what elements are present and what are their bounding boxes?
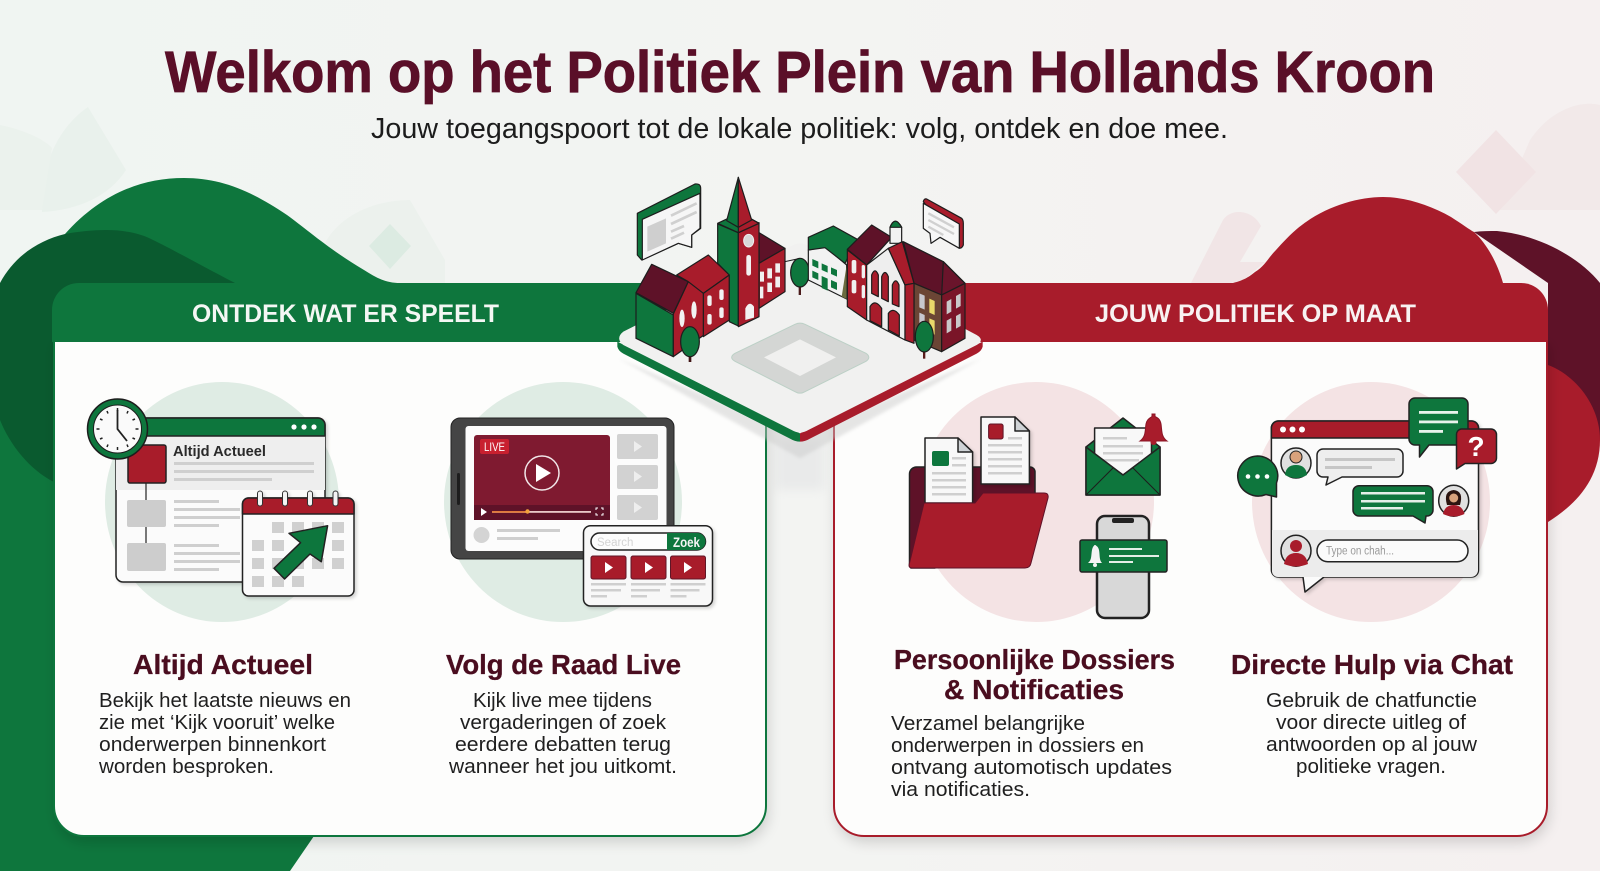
wire xyxy=(785,258,800,262)
plaza xyxy=(732,323,869,393)
body: eerdere debatten terug xyxy=(455,734,671,756)
body: voor directe uitleg of xyxy=(1276,712,1466,734)
platform shadow xyxy=(618,358,982,458)
document green xyxy=(925,438,973,503)
avatar 1 xyxy=(1281,448,1311,478)
town hall xyxy=(867,221,965,352)
chat input xyxy=(1317,540,1468,562)
text block: altijd actueel xyxy=(98,649,351,778)
body: antwoorden op al jouw xyxy=(1266,734,1478,756)
search card xyxy=(584,526,712,606)
body: via notificaties. xyxy=(891,779,1030,801)
body xyxy=(1266,690,1478,778)
avatar 2 xyxy=(1439,485,1469,516)
body: worden besproken. xyxy=(98,756,274,778)
search card: Zoek xyxy=(673,534,700,550)
tablet: LIVE xyxy=(484,442,505,454)
body: zie met ‘Kijk vooruit’ welke xyxy=(99,712,335,734)
browser window: Altijd Actueel xyxy=(173,443,266,460)
panel: ontdek wat er speelt xyxy=(52,283,766,836)
panel header right xyxy=(880,283,1548,342)
backdrop circle 4 xyxy=(1252,382,1490,622)
chat window xyxy=(1271,421,1478,592)
avatar 3 xyxy=(1281,535,1311,566)
bubble green left xyxy=(1238,456,1278,497)
heading: & Notificaties xyxy=(944,674,1124,705)
phone xyxy=(1080,516,1167,618)
document red xyxy=(981,417,1029,484)
backdrop circle 1 xyxy=(105,382,339,622)
body: Kijk live mee tijdens xyxy=(473,690,652,712)
title: Welkom op het Politiek Plein van Hollands Kroon xyxy=(165,40,1435,105)
heading: Altijd Actueel xyxy=(133,649,313,680)
icon: altijd actueel xyxy=(88,382,354,622)
bubble question: ? xyxy=(1467,431,1485,462)
subtitle: Jouw toegangspoort tot de lokale politiek: volg, ontdek en doe mee. xyxy=(371,113,1228,145)
shadow strip between panels xyxy=(776,440,824,490)
text block: persoonlijke dossiers xyxy=(891,644,1175,801)
platform top xyxy=(619,243,981,432)
red background blobs xyxy=(1233,197,1600,522)
search card: Search xyxy=(597,537,633,549)
body: vergaderingen of zoek xyxy=(460,712,667,734)
bubble green top xyxy=(1409,398,1468,457)
folder xyxy=(909,417,1048,568)
panel: jouw politiek op maat xyxy=(834,283,1548,836)
tree middle xyxy=(791,258,809,295)
browser window xyxy=(116,418,325,582)
heading: Volg de Raad Live xyxy=(446,649,681,680)
panel heading right: JOUW POLITIEK OP MAAT xyxy=(1095,300,1416,328)
left building green wing xyxy=(636,264,704,357)
backdrop circle 2 xyxy=(444,382,682,622)
text block: volg de raad live xyxy=(446,649,681,778)
tablet xyxy=(451,418,674,559)
platform edge xyxy=(617,342,983,442)
central isometric town square xyxy=(617,177,983,458)
envelope xyxy=(1086,418,1160,495)
red townhouse xyxy=(847,225,892,320)
chat input: Type on chah... xyxy=(1326,546,1394,558)
speech bubble right xyxy=(923,199,963,248)
tree left xyxy=(681,327,699,362)
heading: Persoonlijke Dossiers xyxy=(894,644,1175,675)
bubble question xyxy=(1456,429,1496,469)
panel body right xyxy=(834,340,1547,836)
icon: directe hulp via chat xyxy=(1238,382,1496,622)
body: onderwerpen in dossiers en xyxy=(891,735,1144,757)
body: onderwerpen binnenkort xyxy=(99,734,326,756)
body xyxy=(891,713,1172,801)
heading xyxy=(894,644,1175,705)
folder front xyxy=(909,493,1048,568)
green gabled house xyxy=(808,226,857,299)
text block: directe hulp via chat xyxy=(1231,649,1513,778)
chat bubble green xyxy=(1353,486,1433,523)
right wing of church xyxy=(759,233,785,308)
tree right xyxy=(915,321,933,359)
panel body left xyxy=(54,340,766,836)
body: Gebruik de chatfunctie xyxy=(1266,690,1477,712)
body xyxy=(98,690,351,778)
backdrop circle 3 xyxy=(918,382,1154,622)
body: Verzamel belangrijke xyxy=(891,713,1085,735)
left building long red xyxy=(677,255,729,337)
icon: volg de raad live xyxy=(444,382,712,622)
icon: dossiers en notificaties xyxy=(909,382,1167,622)
bell red xyxy=(1140,414,1167,445)
church tower xyxy=(718,177,759,327)
chat bubble grey xyxy=(1317,449,1403,485)
body: politieke vragen. xyxy=(1296,756,1446,778)
panel header left xyxy=(52,283,720,342)
clock xyxy=(88,399,148,459)
body: wanneer het jou uitkomt. xyxy=(448,756,677,778)
panel heading left: ONTDEK WAT ER SPEELT xyxy=(192,300,499,328)
body: Bekijk het laatste nieuws en xyxy=(99,690,351,712)
heading: Directe Hulp via Chat xyxy=(1231,649,1513,680)
calendar xyxy=(242,491,354,596)
body xyxy=(448,690,677,778)
notification banner xyxy=(1080,540,1167,572)
speech bubble left xyxy=(637,184,701,260)
body: ontvang automotisch updates xyxy=(891,757,1172,779)
green background blobs xyxy=(0,178,400,871)
